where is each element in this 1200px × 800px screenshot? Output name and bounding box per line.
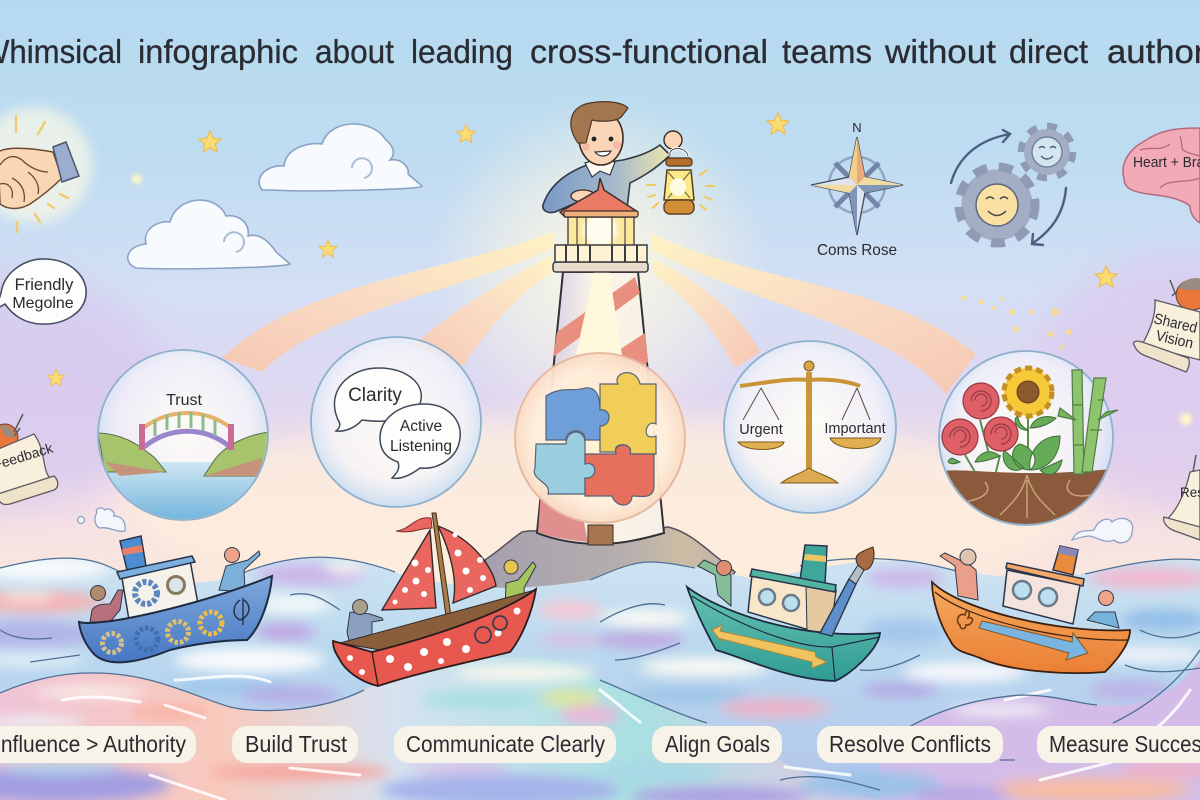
- boat: orange boat with arrow: [932, 546, 1130, 673]
- speech bubble: active listening: Active: [400, 418, 442, 435]
- scroll: shared vision with robin: [1133, 278, 1200, 372]
- funnel: [800, 545, 827, 584]
- front wave: left: [0, 657, 880, 800]
- bridge: [142, 412, 231, 450]
- roses: [942, 383, 1018, 455]
- lantern: [647, 148, 714, 214]
- front wave patches: [0, 665, 1200, 800]
- clouds: [128, 124, 422, 269]
- mast: [432, 513, 453, 631]
- funnel: [120, 536, 146, 570]
- speech bubble: active listening: [380, 404, 460, 478]
- label pills: [0, 726, 1200, 763]
- urgent label: Urgent: [739, 422, 783, 438]
- important label: Important: [824, 421, 886, 437]
- gallery and lantern room: [553, 213, 648, 272]
- scroll: shared vision with robin: Vision: [1154, 327, 1195, 352]
- speech bubble: friendly megaphone: Megolne: [12, 295, 74, 312]
- balance scale: [738, 361, 881, 483]
- cabin: [748, 575, 836, 636]
- deck: [340, 590, 535, 650]
- soil with roots: [946, 470, 1106, 524]
- cliffs: [98, 433, 166, 472]
- bubble: puzzle: [515, 353, 685, 523]
- speech bubble: active listening: Listening: [390, 438, 452, 455]
- cabin: [122, 560, 198, 620]
- cabin: [1003, 570, 1080, 624]
- boat: red polka-dot sailboat: [333, 513, 536, 686]
- speech bubble: friendly megaphone: Friendly: [15, 276, 74, 294]
- back swell patches: [0, 556, 1200, 717]
- title: direct: [1009, 33, 1088, 70]
- scroll: respect: [1164, 455, 1200, 540]
- funnel: [1053, 546, 1078, 575]
- brain: heart and brain: [1123, 128, 1200, 223]
- compass rose: [811, 120, 903, 259]
- boat: green boat with paintbrush: [687, 545, 880, 681]
- title: without: [884, 33, 996, 70]
- stars: [47, 113, 1192, 425]
- lighthouse: [537, 213, 664, 545]
- door: [588, 525, 613, 545]
- pill: align goals: Align Goals: [665, 731, 770, 757]
- pill: communicate clearly: [394, 726, 616, 763]
- hull: [333, 589, 536, 686]
- passenger: [698, 560, 731, 606]
- sweater: [543, 145, 670, 213]
- pill: resolve conflicts: Resolve Conflicts: [829, 731, 991, 757]
- sea waves: [0, 540, 1200, 800]
- water: [108, 462, 256, 519]
- speech bubble: clarity: [334, 368, 421, 431]
- speech bubble: clarity: Clarity: [348, 385, 402, 406]
- light beams: [222, 232, 976, 394]
- pill: communicate clearly: Communicate Clearly: [406, 731, 605, 757]
- speech bubble: friendly megaphone: [0, 259, 86, 324]
- rock under lighthouse: [485, 527, 735, 610]
- lighthouse keeper with lantern: [543, 102, 714, 217]
- bamboo: [1058, 370, 1118, 474]
- passengers: [940, 553, 978, 600]
- hull arrow: [712, 625, 827, 668]
- bubble: clarity and active listening: [311, 337, 481, 507]
- title: about: [315, 33, 394, 70]
- compass N: N: [852, 120, 862, 135]
- title: leading: [411, 33, 513, 70]
- steam puffs: [78, 508, 1133, 543]
- pill: align goals: [652, 726, 782, 763]
- sunflower: [1004, 368, 1052, 416]
- roof: [560, 178, 638, 217]
- hull: [932, 582, 1130, 673]
- compass label: Coms Rose: [817, 242, 897, 259]
- title: teams: [782, 33, 872, 70]
- stems and leaves: [948, 410, 1062, 475]
- sails: [382, 530, 436, 610]
- pill: build trust: [232, 726, 358, 763]
- boat: blue steamer with gears: [79, 536, 272, 662]
- pill: resolve conflicts: [817, 726, 1003, 763]
- front wave: right: [880, 660, 1200, 800]
- hull: [79, 576, 272, 662]
- bubble: garden: [930, 351, 1120, 530]
- pill: measure success: [1037, 726, 1200, 763]
- pill: build trust: Build Trust: [245, 731, 348, 757]
- handshake icon: [0, 107, 92, 232]
- bubble: scales: [724, 341, 896, 513]
- gears with smiley faces and cycle arrows: [951, 126, 1073, 245]
- scroll: feedback with robin: [0, 414, 58, 505]
- pill: influence > authority: [0, 726, 196, 763]
- passengers: [90, 590, 123, 622]
- flag: [396, 518, 432, 532]
- bubble: trust: [98, 350, 270, 522]
- paintbrush: [820, 547, 874, 636]
- hull arrow: [979, 621, 1088, 660]
- pill: influence > authority: Influence > Authority: [0, 731, 186, 757]
- trust label: Trust: [166, 392, 202, 409]
- title: cross-functional: [530, 33, 768, 70]
- sparkles near garden: [962, 296, 1072, 349]
- hull: [687, 587, 880, 681]
- passengers: [347, 612, 383, 648]
- title: infographic: [138, 33, 298, 70]
- puzzle pieces: [534, 373, 656, 505]
